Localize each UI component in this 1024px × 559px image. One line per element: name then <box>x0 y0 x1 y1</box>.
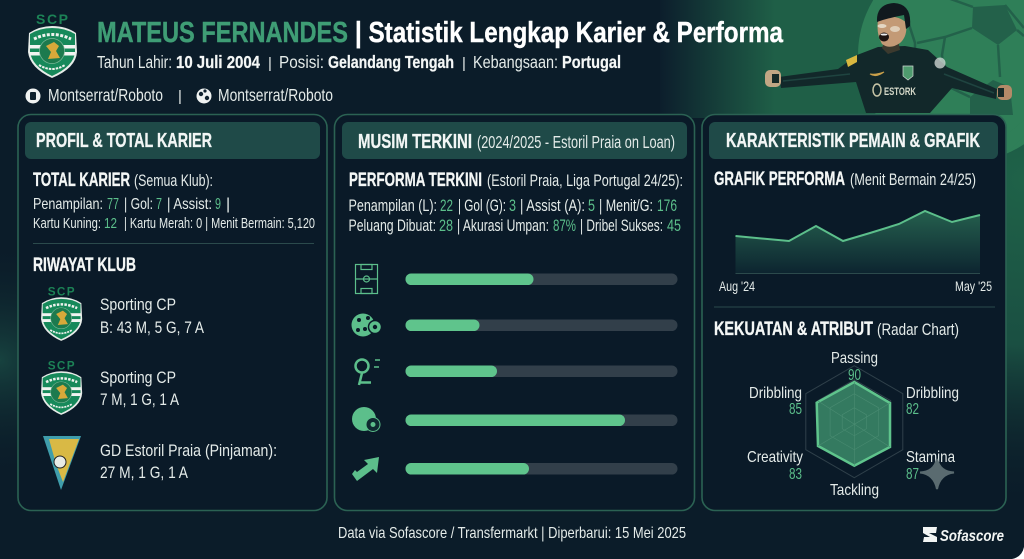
bar: dribbles <box>406 463 678 474</box>
career totals: (Semua Klub): <box>134 172 213 190</box>
bar: goals <box>406 320 678 331</box>
heading: radar: KEKUATAN & ATRIBUT <box>714 318 873 340</box>
club: Sporting CP: Sporting CP <box>100 369 176 387</box>
head <box>878 16 906 47</box>
title <box>97 17 784 49</box>
career totals: TOTAL KARIER <box>33 169 130 191</box>
club: Sporting CP <box>41 360 179 415</box>
radar chart: 83 <box>789 466 802 483</box>
subtitle: birth date, position, nationality <box>97 52 621 72</box>
radar chart: 82 <box>906 401 919 418</box>
current performance stats: 45 <box>667 217 681 235</box>
icon: arrow <box>352 457 379 481</box>
career totals: 7 <box>156 196 162 213</box>
heading: musim terkini: MUSIM TERKINI <box>358 131 472 153</box>
career totals: Kartu Kuning: <box>33 215 101 232</box>
subtitle: birth date, position, nationality: Tahun Lahir: <box>97 52 172 72</box>
current performance stats: (Estoril Praia, Liga Portugal 24/25): <box>487 171 683 190</box>
fists <box>765 70 781 87</box>
club: Sporting CP B: SCP <box>48 286 75 299</box>
club: GD Estoril Praia: 27 M, 1 G, 1 A <box>100 464 188 482</box>
club: Sporting CP B <box>41 286 204 341</box>
icon: goals <box>352 314 382 336</box>
current performance stats: Penampilan (L): <box>348 197 437 215</box>
sponsor: ESTORK <box>884 86 916 98</box>
subtitle: birth date, position, nationality: Kebangsaan: <box>473 52 558 72</box>
club: GD Estoril Praia <box>43 436 277 490</box>
icon: pitch <box>356 264 378 294</box>
subtitle: birth date, position, nationality: 10 Juli 2004 <box>176 52 260 72</box>
heading: musim terkini: (2024/2025 - Estoril Praia on Loan) <box>477 132 675 152</box>
font legend <box>26 85 333 105</box>
career totals: Penampilan: <box>33 196 103 213</box>
career totals: 12 <box>104 215 117 232</box>
radar chart: 87 <box>906 466 919 483</box>
career totals: | <box>226 196 230 213</box>
icon: assists <box>356 360 380 385</box>
club: Sporting CP B: Sporting CP <box>100 296 176 314</box>
current performance stats: | Assist (A): <box>520 197 585 215</box>
current performance stats: | Dribel Sukses: <box>580 217 663 235</box>
current performance stats: | Akurasi Umpan: <box>457 217 549 235</box>
career totals: | Assist: <box>167 196 212 213</box>
bar: passing accuracy <box>406 414 678 426</box>
subtitle: birth date, position, nationality: Portugal <box>562 52 621 72</box>
font legend: Montserrat/Roboto <box>48 85 163 105</box>
heading: profil: PROFIL & TOTAL KARIER <box>36 130 212 152</box>
crest: header <box>28 11 77 78</box>
font legend: | <box>178 88 182 105</box>
current performance stats: 176 <box>657 197 677 215</box>
panel: current season <box>334 114 694 510</box>
panel: characteristics and charts <box>702 114 1006 510</box>
line chart: minutes played <box>719 211 992 294</box>
sofascore logo <box>923 527 1004 545</box>
jersey <box>779 46 997 113</box>
current performance stats <box>348 169 683 235</box>
current performance stats: 5 <box>588 197 595 215</box>
club: GD Estoril Praia: GD Estoril Praia (Pinjaman): <box>100 442 277 460</box>
current performance stats: | Menit/G: <box>599 197 653 215</box>
career totals: 77 <box>107 196 119 213</box>
neck <box>882 40 900 54</box>
current performance stats: 87% <box>553 217 576 235</box>
career totals <box>33 169 315 232</box>
career totals: | Kartu Merah: 0 | Menit Bermain: 5,120 <box>124 215 315 232</box>
current performance stats: | Gol (G): <box>458 197 506 215</box>
crest: header: SCP <box>36 11 68 27</box>
career totals: | Gol: <box>124 196 153 213</box>
radar chart: Tackling <box>830 482 879 499</box>
current performance stats: 22 <box>440 197 453 215</box>
heading: radar: (Radar Chart) <box>877 320 959 339</box>
subtitle: birth date, position, nationality: | <box>462 55 466 72</box>
heading: performance chart: GRAFIK PERFORMA <box>714 168 845 190</box>
current performance stats: Peluang Dibuat: <box>348 217 436 235</box>
sofascore logo: Sofascore <box>940 528 1004 545</box>
line chart: minutes played: May '25 <box>955 278 992 294</box>
title: MATEUS FERNANDES <box>97 17 348 49</box>
icon: passing accuracy <box>352 407 380 432</box>
club: Sporting CP: SCP <box>48 360 75 373</box>
radar chart: Passing <box>831 350 878 367</box>
subtitle: birth date, position, nationality: Gelandang Tengah <box>328 52 454 72</box>
career totals: 9 <box>215 196 221 213</box>
bar: assists <box>406 366 678 377</box>
heading: performance chart: (Menit Bermain 24/25) <box>850 170 976 189</box>
current performance stats: PERFORMA TERKINI <box>349 169 482 191</box>
heading: musim terkini <box>358 131 675 153</box>
icon: sparkle <box>920 459 954 489</box>
bar: appearances <box>406 274 678 285</box>
panel: profile and career totals <box>18 114 327 510</box>
radar chart: Creativity <box>747 449 803 466</box>
club: Sporting CP: 7 M, 1 G, 1 A <box>100 391 179 409</box>
player photo <box>765 3 1012 113</box>
heading: club history: RIWAYAT KLUB <box>33 254 136 276</box>
subtitle: birth date, position, nationality: | <box>268 55 272 72</box>
footer source: Data via Sofascore / Transfermarkt | Diperbarui: 15 Mei 2025 <box>338 525 686 542</box>
current performance stats: 28 <box>439 217 453 235</box>
radar chart: Dribbling <box>906 385 959 402</box>
radar chart: 90 <box>848 367 861 384</box>
club: Sporting CP B: B: 43 M, 5 G, 7 A <box>100 319 204 337</box>
font legend: Montserrat/Roboto <box>218 85 333 105</box>
radar chart <box>747 350 959 499</box>
title: | Statistik Lengkap Karier & Performa <box>355 17 784 49</box>
radar chart: 85 <box>789 401 802 418</box>
subtitle: birth date, position, nationality: Posisi: <box>279 52 324 72</box>
radar chart: Stamina <box>906 449 955 466</box>
sponsor <box>873 84 916 98</box>
line chart: minutes played: Aug '24 <box>719 278 755 294</box>
radar chart: Dribbling <box>749 385 802 402</box>
current performance stats: 3 <box>509 197 516 215</box>
